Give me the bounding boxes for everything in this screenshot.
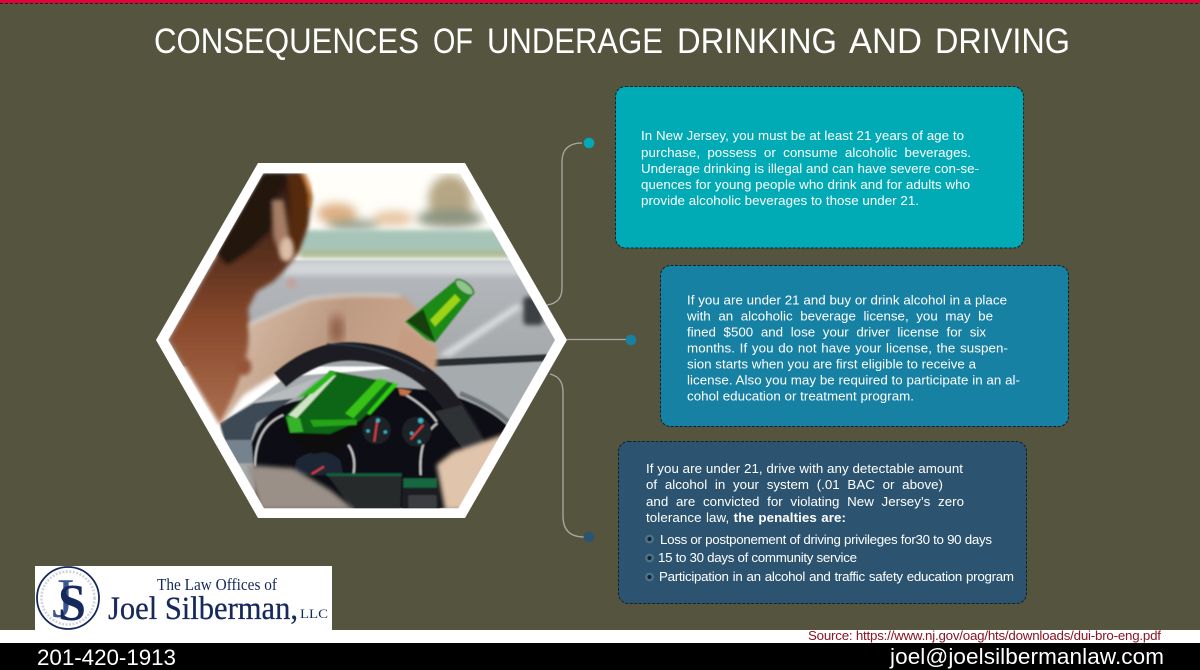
email address: joel@joelsilbermanlaw.com [889, 644, 1164, 669]
panel: minimum drinking age: In New Jersey, you must be at least 21 years of age to [641, 128, 964, 143]
footer black band [0, 643, 1200, 670]
panel: zero tolerance penalties: of alcohol in your system (.01 BAC or above) [646, 477, 943, 492]
panel: zero tolerance penalties: and are convicted for violating New Jersey’s zero [646, 494, 964, 509]
footer white band [0, 630, 1200, 643]
connector dot 3 [584, 532, 594, 542]
panel: minimum drinking age: purchase, possess or consume alcoholic beverages. [641, 145, 971, 160]
title: CONSEQUENCES [154, 22, 419, 61]
panel: minimum drinking age: provide alcoholic beverages to those under 21. [641, 193, 919, 208]
logo: Law Offices of Joel Silberman: J [52, 568, 74, 630]
arm and hand on wheel [220, 295, 437, 425]
upper bottle [405, 282, 473, 343]
penalty list: 15 to 30 days of community service [658, 550, 857, 565]
phone number: 201-420-1913 [37, 645, 176, 670]
logo: Law Offices of Joel Silberman: The Law Offices of [157, 575, 277, 594]
penalty list: Loss or postponement of driving privileges for30 to 90 days [660, 532, 992, 547]
panel: under 21 buying or drinking: cohol education or treatment program. [687, 388, 914, 404]
panel: under 21 buying or drinking: sion starts when you are first eligible to receive a [687, 356, 977, 372]
panel: under 21 buying or drinking: fined $500 and lose your driver license for six [687, 324, 986, 340]
panel: minimum drinking age: quences for young people who drink and for adults who [641, 177, 970, 192]
panel: minimum drinking age [616, 86, 1024, 248]
right hand [437, 432, 512, 510]
connector lines [547, 143, 626, 537]
panel: zero tolerance penalties [618, 442, 1026, 604]
logo: Law Offices of Joel Silberman [35, 566, 332, 632]
panel: under 21 buying or drinking: license. Also you may be required to participate in an al- [687, 372, 1020, 388]
panel: under 21 buying or drinking [660, 266, 1068, 426]
logo: Law Offices of Joel Silberman: S [58, 575, 86, 632]
lower bottle [285, 371, 398, 454]
connector dot 1 [584, 138, 594, 148]
title: DRIVING [935, 22, 1070, 61]
panel: minimum drinking age: Underage drinking is illegal and can have severe con-se- [641, 161, 979, 176]
penalty list [645, 532, 1014, 584]
source line: Source: https://www.nj.gov/oag/hts/downloads/dui-bro-eng.pdf [808, 628, 1161, 643]
title [154, 22, 1070, 61]
shirt [247, 465, 355, 510]
logo: Law Offices of Joel Silberman: LLC [300, 606, 328, 621]
penalty list: Participation in an alcohol and traffic safety education program [659, 569, 1014, 584]
steering hub [327, 474, 402, 510]
connector dot 2 [626, 335, 636, 345]
title: OF [433, 22, 473, 61]
dashboard [220, 366, 540, 494]
panel: under 21 buying or drinking: If you are under 21 and buy or drink alcohol in a place [687, 292, 1007, 308]
panel: zero tolerance penalties: tolerance law, the penalties are: [646, 510, 846, 525]
instrument cluster [252, 383, 510, 508]
person: neck and shoulder [168, 173, 307, 425]
steering wheel [280, 351, 480, 452]
title: AND [849, 22, 922, 61]
title: DRINKING [677, 22, 837, 61]
logo: Law Offices of Joel Silberman: Joel Silberman, [108, 591, 298, 627]
title: UNDERAGE [487, 22, 663, 61]
hexagon photo: drunk driver with beer bottle [156, 163, 567, 518]
panel: zero tolerance penalties: If you are under 21, drive with any detectable amount [646, 461, 963, 476]
panel: under 21 buying or drinking: with an alcoholic beverage license, you may be [686, 308, 993, 324]
panel: under 21 buying or drinking: months. If you do not have your license, the suspen- [687, 340, 1008, 356]
